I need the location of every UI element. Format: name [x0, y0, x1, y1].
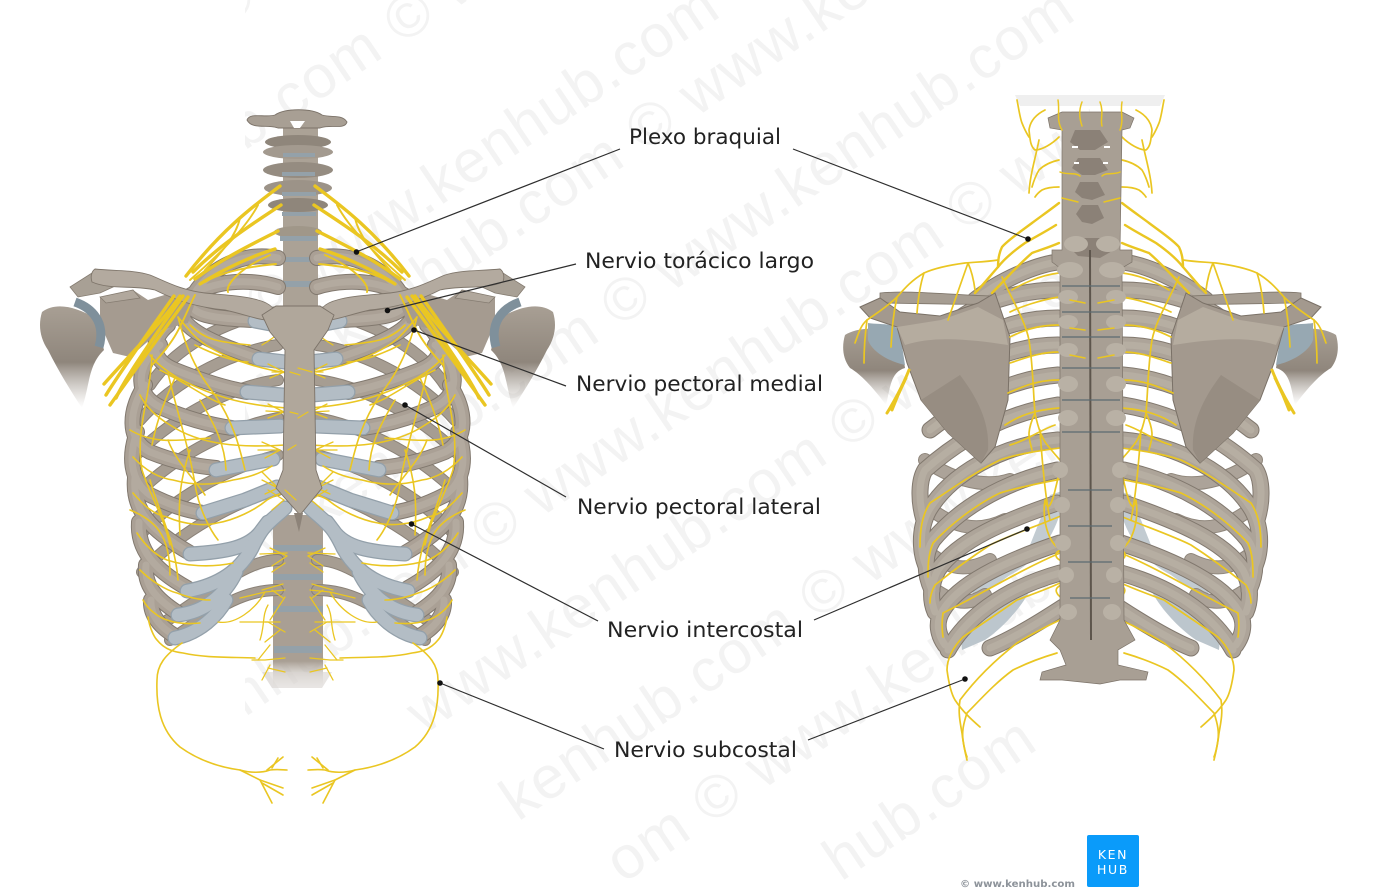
leader: Plexo braquial, anterior [354, 149, 620, 255]
sternum [262, 306, 334, 532]
sternal nerve twigs [285, 368, 312, 500]
logo: Kenhub [1087, 835, 1139, 887]
leader: Nervio pectoral lateral [402, 402, 566, 497]
label: Plexo braquial: Plexo braquial [629, 125, 781, 149]
label: Nervio intercostal: Nervio intercostal [607, 618, 803, 642]
label: Nervio torácico largo: Nervio torácico largo [585, 249, 814, 273]
anatomical figure: anterior thorax [40, 110, 555, 803]
watermark: om © www.kenhub.com [593, 470, 1177, 895]
left half of posterior rib cage, scapula and nerves [843, 100, 1070, 760]
watermark: kenhub.com © www.kenhub.com [488, 265, 1284, 833]
watermark: hub.com [811, 703, 1048, 893]
anterior vertebral column [247, 110, 347, 688]
posterior vertebral column [1040, 112, 1148, 684]
anatomical figure: posterior thorax [843, 95, 1338, 760]
leader: Plexo braquial, posterior [793, 149, 1031, 242]
leader: Nervio intercostal, posterior [814, 526, 1030, 620]
watermark: www.kenhub.com © www.kenhub.com [393, 95, 1314, 746]
logo: Kenhub: HUB [1097, 862, 1129, 877]
right half of anterior rib cage, shoulder and nerves [305, 186, 555, 803]
watermark [245, 0, 1090, 880]
skull base fade [1015, 95, 1165, 106]
leader: Nervio torácico largo [385, 264, 576, 313]
leader: Nervio subcostal, anterior [437, 680, 604, 749]
copyright: © www.kenhub.com [960, 879, 1075, 890]
label: Nervio pectoral lateral: Nervio pectoral lateral [577, 495, 821, 519]
logo: Kenhub: KEN [1098, 847, 1128, 862]
label: Nervio subcostal: Nervio subcostal [614, 738, 797, 762]
left half of anterior rib cage, shoulder and nerves [40, 186, 290, 803]
right half of posterior rib cage, scapula and nerves [1111, 100, 1338, 760]
leader: Nervio intercostal, anterior [409, 521, 598, 621]
label: Nervio pectoral medial: Nervio pectoral medial [576, 372, 823, 396]
leader: Nervio subcostal, posterior [808, 676, 968, 740]
cervical nerve roots crossing the neck [1058, 100, 1122, 358]
leader: Nervio pectoral medial [411, 327, 566, 386]
